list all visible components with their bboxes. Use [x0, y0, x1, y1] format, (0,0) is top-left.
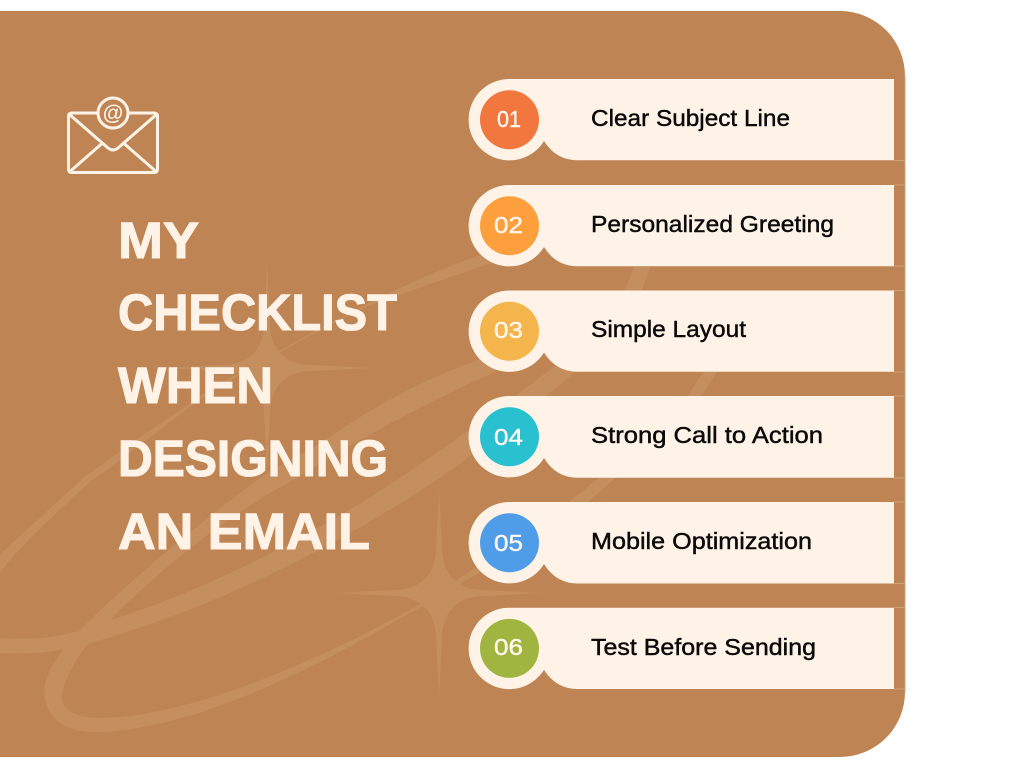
checklist item 02: Personalized Greeting	[591, 211, 834, 237]
checklist item 03	[469, 290, 894, 372]
title: MY	[118, 212, 199, 269]
checklist item 03: 03	[494, 317, 523, 343]
checklist item 02: 02	[494, 212, 523, 238]
checklist item 05	[469, 502, 894, 584]
icon: email envelope with at sign	[68, 98, 158, 172]
checklist item 06	[469, 608, 894, 689]
decorative swooshes and sparkles	[0, 250, 717, 732]
checklist item 02	[469, 185, 894, 266]
checklist item 04: Strong Call to Action	[591, 422, 823, 448]
title: AN EMAIL	[118, 503, 370, 560]
checklist item 06: 06	[494, 634, 523, 660]
checklist item 04: 04	[494, 424, 523, 450]
checklist item 05: 05	[494, 530, 523, 556]
title	[118, 212, 397, 560]
checklist item 05: Mobile Optimization	[591, 528, 812, 554]
checklist item 04	[469, 396, 894, 478]
checklist item 01	[469, 79, 894, 160]
icon: email envelope with at sign: @	[103, 102, 123, 125]
checklist item 06: Test Before Sending	[591, 634, 816, 660]
title: CHECKLIST	[118, 284, 397, 341]
checklist item 03: Simple Layout	[591, 316, 746, 342]
title: WHEN	[118, 357, 273, 414]
right edge strip lines	[894, 76, 905, 692]
checklist item 01: Clear Subject Line	[591, 105, 790, 131]
checklist item 01: 01	[497, 106, 521, 132]
title: DESIGNING	[118, 430, 388, 487]
